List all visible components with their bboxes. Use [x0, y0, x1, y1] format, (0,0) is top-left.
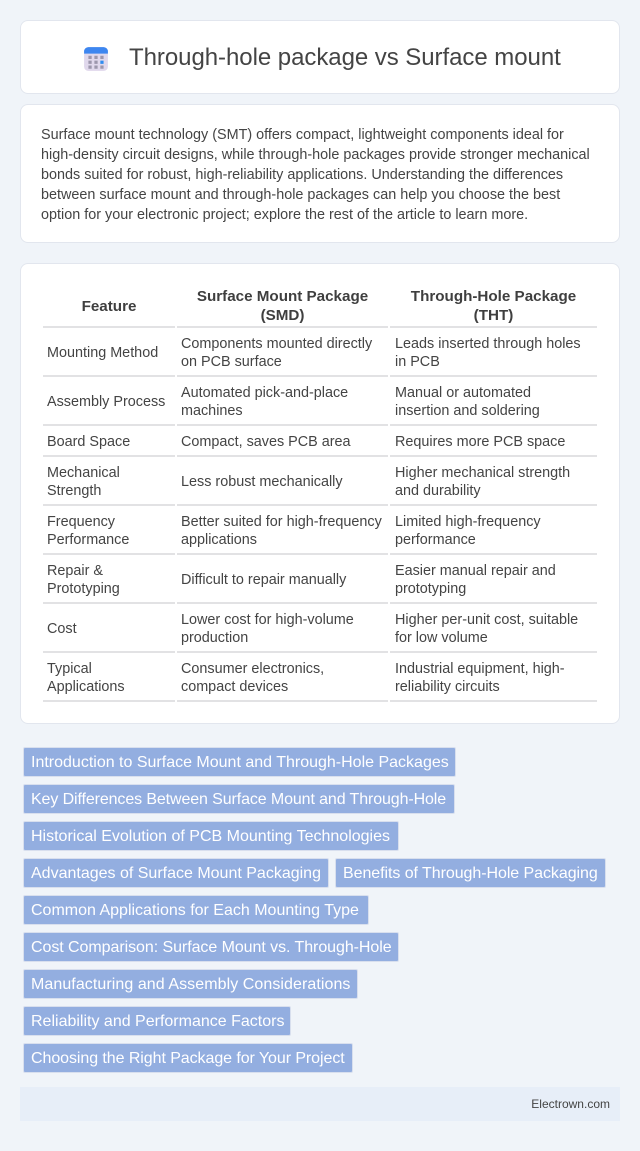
intro paragraph: between surface mount and through-hole packages can help you choose the best	[41, 187, 560, 203]
comparison table: Better suited for high-frequency	[181, 514, 382, 530]
comparison table: Requires more PCB space	[395, 434, 565, 450]
row: mechanical strength	[43, 465, 597, 506]
comparison table: Cost	[47, 621, 77, 637]
comparison table: performance	[395, 532, 476, 548]
row: typical applications	[43, 661, 597, 702]
link: reliability: Reliability and Performance Factors	[31, 1013, 284, 1030]
comparison table: Frequency	[47, 514, 115, 530]
comparison table: Compact, saves PCB area	[181, 434, 351, 450]
link: reliability	[23, 1006, 291, 1036]
link: cost comparison	[23, 932, 399, 962]
link: benefits of through-hole: Benefits of Through-Hole Packaging	[343, 865, 598, 882]
comparison table: Through-Hole Package	[411, 288, 576, 305]
row: mounting method	[43, 336, 597, 377]
comparison table: (THT)	[474, 307, 513, 324]
footer credit: Electrown.com	[531, 1097, 610, 1111]
comparison table: Difficult to repair manually	[181, 572, 346, 588]
comparison table: Industrial equipment, high-	[395, 661, 565, 677]
comparison table: and durability	[395, 483, 481, 499]
comparison table: Typical	[47, 661, 92, 677]
comparison table: prototyping	[395, 581, 466, 597]
link: introduction: Introduction to Surface Mount and Through-Hole Packages	[31, 754, 449, 771]
comparison table: Higher per-unit cost, suitable	[395, 612, 578, 628]
intro paragraph	[41, 127, 590, 223]
link: cost comparison: Cost Comparison: Surface Mount vs. Through-Hole	[31, 939, 392, 956]
comparison table: insertion and soldering	[395, 403, 540, 419]
comparison table: Components mounted directly	[181, 336, 372, 352]
comparison table: on PCB surface	[181, 354, 282, 370]
comparison table: Performance	[47, 532, 129, 548]
title: Through-hole package vs Surface mount	[129, 44, 561, 71]
comparison table: machines	[181, 403, 243, 419]
link: key differences: Key Differences Between Surface Mount and Through-Hole	[31, 791, 446, 808]
row: repair and prototyping	[43, 563, 597, 604]
comparison table: Consumer electronics,	[181, 661, 324, 677]
link: advantages of surface mount	[23, 858, 329, 888]
panel: header	[20, 20, 620, 94]
panel: intro text	[20, 104, 620, 243]
comparison table: Surface Mount Package	[197, 288, 368, 305]
comparison table: Limited high-frequency	[395, 514, 541, 530]
comparison table: Easier manual repair and	[395, 563, 556, 579]
comparison table: Prototyping	[47, 581, 120, 597]
comparison table: Less robust mechanically	[181, 474, 343, 490]
comparison table: compact devices	[181, 679, 288, 695]
comparison table: Applications	[47, 679, 125, 695]
link: manufacturing: Manufacturing and Assembly Considerations	[31, 976, 350, 993]
comparison table: applications	[181, 532, 257, 548]
link: manufacturing	[23, 969, 358, 999]
intro paragraph: high-density circuit designs, while through-hole packages provide stronger mechanical	[41, 147, 590, 163]
icon: calendar grid	[84, 47, 108, 71]
link: historical evolution: Historical Evolution of PCB Mounting Technologies	[31, 828, 390, 845]
comparison table	[43, 288, 597, 702]
comparison table: Strength	[47, 483, 101, 499]
row: frequency performance	[43, 514, 597, 555]
link: choosing package	[23, 1043, 353, 1073]
link: benefits of through-hole	[335, 858, 606, 888]
comparison table: Repair &	[47, 563, 103, 579]
comparison table: Automated pick-and-place	[181, 385, 348, 401]
comparison table: Manual or automated	[395, 385, 531, 401]
comparison table: Mounting Method	[47, 345, 158, 361]
comparison table: Assembly Process	[47, 394, 165, 410]
panel: comparison table	[20, 263, 620, 724]
link: key differences	[23, 784, 455, 814]
comparison table: Lower cost for high-volume	[181, 612, 354, 628]
comparison table: Feature	[82, 298, 136, 315]
row: cost	[43, 612, 597, 653]
intro paragraph: Surface mount technology (SMT) offers compact, lightweight components ideal for	[41, 127, 564, 143]
comparison table: in PCB	[395, 354, 440, 370]
intro paragraph: option for your electronic project; explore the rest of the article to learn more.	[41, 207, 528, 223]
comparison table: reliability circuits	[395, 679, 500, 695]
link: choosing package: Choosing the Right Package for Your Project	[31, 1050, 345, 1067]
comparison table: Leads inserted through holes	[395, 336, 581, 352]
comparison table: for low volume	[395, 630, 488, 646]
intro paragraph: bonds suited for robust, high-reliability applications. Understanding the differences	[41, 167, 563, 183]
comparison table: Board Space	[47, 434, 130, 450]
comparison table: Mechanical	[47, 465, 120, 481]
comparison table: (SMD)	[261, 307, 304, 324]
link: common applications: Common Applications for Each Mounting Type	[31, 902, 359, 919]
link: common applications	[23, 895, 369, 925]
row: assembly process	[43, 385, 597, 426]
comparison table: production	[181, 630, 248, 646]
comparison table: Higher mechanical strength	[395, 465, 570, 481]
table header	[43, 288, 597, 328]
link: introduction	[23, 747, 456, 777]
footer bar	[20, 1087, 620, 1121]
row: board space	[43, 434, 597, 457]
link: historical evolution	[23, 821, 399, 851]
link: advantages of surface mount: Advantages of Surface Mount Packaging	[31, 865, 321, 882]
